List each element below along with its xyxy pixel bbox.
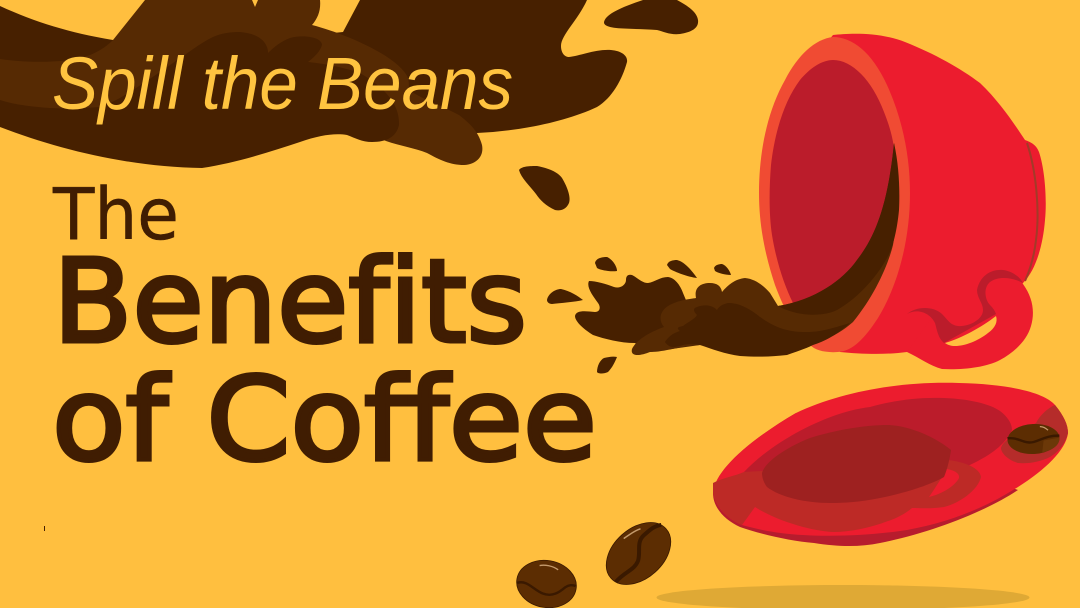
falling coffee drop (519, 166, 570, 210)
shadow handle opening (929, 469, 959, 497)
cup interior (770, 60, 895, 303)
tiny speck (44, 526, 45, 531)
title (52, 173, 597, 488)
stream lower dark band (665, 303, 850, 357)
handle shadow (907, 270, 1023, 343)
saucer ground shadow (656, 585, 1030, 608)
subtitle: Spill the Beans (52, 42, 513, 125)
title: The (52, 173, 179, 256)
stream upper dark wedge (778, 143, 899, 315)
coffee bean on saucer (1007, 423, 1060, 455)
cup handle (907, 275, 1033, 369)
splash main blob (575, 275, 700, 352)
cup rim (759, 37, 910, 352)
title: Benefits (53, 236, 527, 370)
coffee bean falling (594, 510, 683, 597)
coffee stream and splash (575, 143, 899, 357)
title: of Coffee (52, 354, 597, 488)
stream light band (632, 143, 898, 355)
saucer top (713, 383, 1068, 536)
red cup (759, 34, 1046, 369)
cup base line (1025, 143, 1038, 281)
cup cast shadow (713, 460, 981, 532)
coffee bean at bottom (513, 556, 580, 608)
cup shadow core (762, 425, 951, 503)
top coffee splash (0, 0, 627, 168)
saucer (713, 383, 1068, 546)
saucer underside (713, 413, 1018, 546)
bean shadow on saucer (1001, 405, 1068, 463)
handle opening (945, 316, 997, 346)
cup body (780, 34, 1046, 354)
splash droplets (547, 257, 731, 374)
top right coffee drop (604, 0, 698, 34)
saucer well (744, 398, 1012, 490)
